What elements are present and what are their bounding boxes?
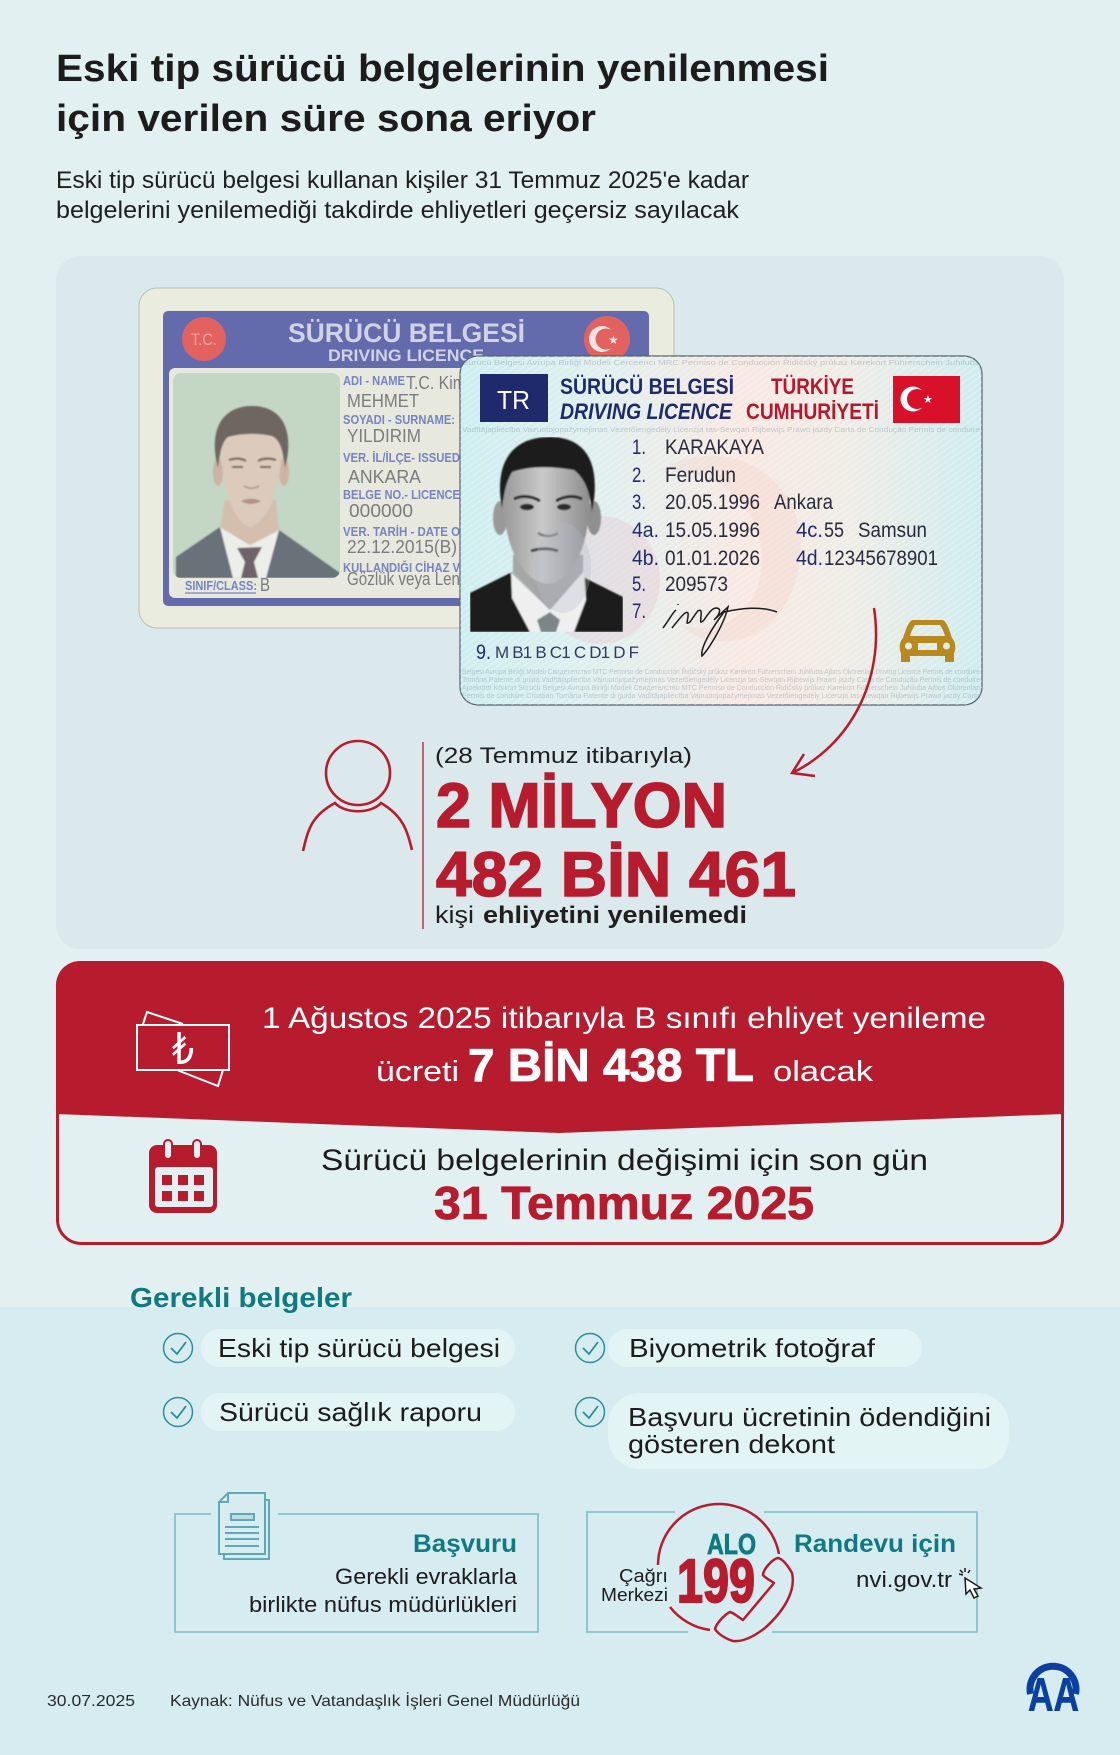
item: health report [164,1393,515,1431]
new card fields: M B1 B C1 C D1 D F [495,643,639,662]
call centre label: Merkezi [601,1585,668,1605]
icon: banknote [137,1012,229,1086]
new card fields: 20.05.1996 [665,491,760,514]
statistic: ehliyetini yenilemedi [483,902,747,929]
new card car icon [900,620,955,662]
new card fields: 9. [476,641,491,664]
watermark crescent [660,456,801,642]
background: lower section [0,1307,1120,1755]
icon: document [219,1493,269,1559]
hologram lens [535,523,591,613]
footer: date: 30.07.2025 [47,1693,135,1710]
fee text: 7 BİN 438 TL [468,1039,754,1091]
old licence card [139,288,674,628]
heading: required documents: Gerekli belgeler [130,1282,352,1313]
new card signature [663,604,777,656]
old licence card: YILDIRIM [347,426,421,446]
item: biometric photo: Biyometrik fotoğraf [629,1333,876,1363]
divider [422,742,424,929]
old licence card: B [260,575,270,595]
box: application: birlikte nüfus müdürlükleri [249,1592,517,1617]
box: application: Başvuru [413,1530,517,1558]
old card emblems [182,317,226,361]
new card fields: 15.05.1996 [665,519,760,542]
fee text: 1 Ağustos 2025 itibarıyla B sınıfı ehliyet yenileme [262,1002,986,1035]
call centre label: Çağrı [619,1566,668,1586]
title: Eski tip sürücü belgelerinin yenilenmesi [56,48,829,90]
icon: cursor [959,1568,981,1598]
new card heading: SÜRÜCÜ BELGESİ [560,374,734,399]
new card heading: TÜRKİYE [771,374,854,399]
statistic: 2 MİLYON [436,771,727,841]
new card heading: DRIVING LICENCE [560,399,733,424]
new card TR badge [480,374,548,422]
item: old licence: Eski tip sürücü belgesi [218,1333,500,1363]
fee text: ücreti [376,1056,459,1088]
new card fields: Ferudun [665,464,736,487]
item: biometric photo [576,1329,922,1367]
old card fields: KULLANDIĞI CİHAZ V [343,560,460,575]
new card fields [476,436,938,664]
item: old licence [164,1329,515,1367]
item: payment receipt [576,1393,1009,1469]
new card fields: 3. [632,491,646,514]
new card fields: 4d. [796,547,823,570]
new card fields: 4b. [632,547,659,570]
new card fields: 01.01.2026 [665,547,760,570]
old card heading: SÜRÜCÜ BELGESİ [288,318,525,348]
old licence card: ANKARA [348,467,421,487]
old card fields [185,373,460,593]
statistic: kişi [435,902,474,929]
micro text: Ajoekortti Körkort Sürücü Belgesi Avrupa Birliği Modeli Свидетелство MTC Permiso de Conducción Řidičský průkaz Kørekort Führerschein Juhiluba Ajbos Ökörenlap [462,683,980,692]
call centre label [601,1566,668,1605]
new card fields: KARAKAYA [665,436,764,459]
old licence card: T.C. Kim [406,373,466,393]
new card photo [470,437,623,632]
micro text: Tomâna Patente di guida Vadītājapliecība Vairuotojopažymėjimas Vezetõiengedély Liċenzja tas-Sewqan Rijbewijs Prawo jazdy Carta de Condução Permis de conduire [462,677,980,684]
old licence card: Gözlük veya Len [347,569,460,589]
old licence card: 22.12.2015(B) [347,537,457,557]
old licence card: ★ [608,333,619,347]
deadline text: Sürücü belgelerinin değişimi için son gün [321,1144,928,1177]
item: payment receipt: Başvuru ücretinin ödendiğini [628,1402,991,1432]
new card heading [560,374,879,424]
new card heading: CUMHURİYETİ [746,399,879,424]
logo: AA: AA [1028,1668,1079,1721]
icon: calendar [149,1140,217,1213]
title [56,48,829,140]
icon: phone handset [715,1558,793,1641]
box: appointment [587,1504,981,1641]
appointment heading: Randevu için [794,1530,956,1558]
micro text [462,358,980,700]
box: application [175,1493,538,1632]
footer: source: Kaynak: Nüfus ve Vatandaşlık İşleri Genel Müdürlüğü [170,1691,580,1710]
deadline date: 31 Temmuz 2025 [434,1177,814,1229]
old card fields: VER. İL/İLÇE- ISSUED [343,450,460,465]
old card photo [173,373,340,578]
old card fields: BELGE NO.- LICENCE [343,487,460,502]
old card fields: VER. TARİH - DATE O [343,524,460,539]
new card fields: 1. [632,436,646,459]
subtitle [56,167,749,224]
new card fields: 4a. [632,519,659,542]
statistic [435,743,796,929]
icon: phone ring [658,1504,779,1630]
statistic: (28 Temmuz itibarıyla) [435,743,692,768]
panel: fee and deadline [56,961,1064,1244]
new card flag [893,376,960,423]
new card fields: Samsun [858,519,927,542]
subtitle: belgelerini yenilemediği takdirde ehliyetleri geçersiz sayılacak [56,197,740,224]
hologram [540,516,660,644]
new card fields: 12345678901 [824,547,938,570]
title: için verilen süre sona eriyor [56,98,596,140]
micro text: Vadītājapliecība Vairuotojopažymėjimas Vezetõiengedély Liċenzja tas-Sewqan Rijbewijs Prawo jazdy Carta de Condução Permis de conduire [462,427,980,434]
new card fields: 7. [632,600,646,623]
new licence card [460,356,982,705]
old licence card: MEHMET [347,391,419,411]
199: 199 [677,1547,755,1615]
old card fields: SOYADI - SURNAME: [343,412,455,427]
icon: person [303,741,412,851]
old licence card: T.C. [191,330,217,349]
new card fields: 2. [632,464,646,487]
item: health report: Sürücü sağlık raporu [219,1397,482,1427]
ALO: ALO [707,1529,756,1561]
icon: banknote: ₺ [172,1025,194,1074]
new card fields: 5. [632,573,646,596]
micro text: Sürücü Belgesi Avrupa Birliği Modeli Cerceenci MRC Permiso de Conducción Řidičský průkaz Kørekort Führerschein Juhiluba [462,358,980,367]
statistic: 482 BİN 461 [436,840,796,910]
fee text: olacak [773,1056,874,1088]
micro text: Belgesi Avrupa Birliği Modeli Свидетелство MTC Permiso de Conducción Řidičský průkaz Kørekort Führerschein Juhiluba Ajbos Ökörenlap Driving Licence Permis de conduire [462,667,980,676]
new card fields: 4c. [796,519,823,542]
fee text [262,1002,986,1091]
old licence card: 000000 [349,501,413,521]
item: payment receipt: gösteren dekont [628,1429,836,1459]
old card fields: ADI - NAME [343,373,405,388]
box: application: Gerekli evraklarla [335,1564,518,1589]
new card fields: 55 [824,519,844,542]
old card fields: SINIF/CLASS: [185,578,257,593]
micro text: Permis de conduire Croatian Tomâna Patente di guida Vadītājapliecība Vairuotojopažymėjimas Vezetõiengedély Liċenzja tas-Sewqan Rijbewijs Prawo jazdy Carta [462,693,980,700]
panel: licences and statistic [56,256,1064,949]
new card TR badge: TR [497,385,530,415]
new card fields: 209573 [665,573,728,596]
subtitle: Eski tip sürücü belgesi kullanan kişiler 31 Temmuz 2025'e kadar [56,167,749,194]
arrow [792,608,876,776]
website: nvi.gov.tr [856,1567,952,1592]
new card flag: ★ [923,394,933,406]
old licence card: DRIVING LICENCE [328,346,484,365]
new card fields: Ankara [774,491,833,514]
